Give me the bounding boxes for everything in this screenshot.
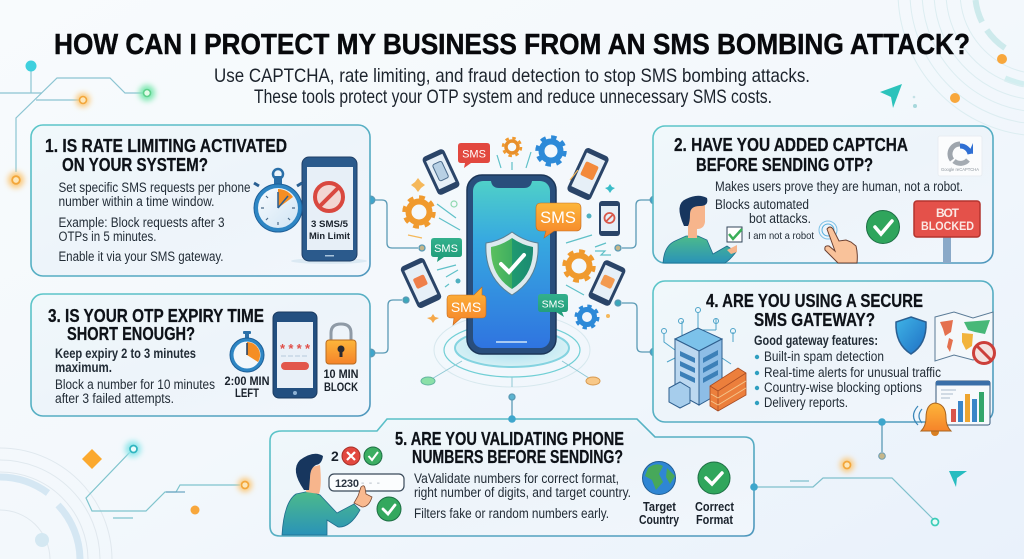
panel 2 body text: Makes users prove they are human, not a robot. — [715, 179, 963, 194]
icon: person with checkbox — [663, 196, 742, 263]
decorative circuit: bottom left — [0, 441, 252, 559]
panel 2 heading: 2. HAVE YOU ADDED CAPTCHA — [674, 135, 908, 155]
icon: server building — [662, 308, 736, 408]
decorative circuit: top left — [0, 60, 155, 188]
decorative circuit: bottom right — [754, 458, 967, 526]
phone number input field: 1230 — [335, 478, 359, 490]
panel 2 body text — [715, 179, 963, 242]
icon: padlock: 10 MIN — [324, 369, 358, 381]
panel 4: secure gateway — [653, 281, 994, 459]
central phone illustration — [399, 137, 627, 387]
phone number input field — [329, 474, 404, 507]
icon: bot blocked sign: BLOCKED — [921, 219, 974, 233]
icon: alert bell — [914, 403, 951, 436]
panel 3 heading: 3. IS YOUR OTP EXPIRY TIME — [48, 306, 264, 326]
panel 1 heading: ON YOUR SYSTEM? — [62, 155, 208, 175]
icon: target country globe — [639, 462, 679, 527]
panel 3 body text — [55, 346, 215, 406]
icon: stopwatch 2:00 left: LEFT — [235, 388, 259, 400]
subtitle: Use CAPTCHA, rate limiting, and fraud detection to stop SMS bombing attacks. — [214, 65, 810, 87]
base rings — [421, 313, 600, 387]
panel 5 body text: Filters fake or random numbers early. — [414, 506, 609, 521]
panel 4 feature list: Built-in spam detection — [764, 349, 884, 364]
subtitle — [214, 65, 810, 108]
icon: correct format check: Correct — [695, 500, 735, 514]
icon: reCAPTCHA badge — [938, 136, 982, 176]
icon: hand tapping — [819, 221, 857, 263]
panel 1 body text: Set specific SMS requests per phone — [58, 180, 250, 195]
shield — [486, 232, 538, 295]
panel 3 body text: Keep expiry 2 to 3 minutes — [55, 346, 196, 361]
panel 2 heading — [674, 135, 908, 175]
icon: world map with block sign — [935, 312, 994, 364]
panel 3 heading: SHORT ENOUGH? — [67, 324, 195, 344]
panel 5 heading: NUMBERS BEFORE SENDING? — [412, 447, 623, 467]
panel 5 body text — [414, 471, 631, 521]
icon: analytics chart window — [936, 381, 990, 425]
tilted phones — [399, 147, 627, 309]
icon: brick wall — [710, 368, 746, 411]
decorative radial arcs: top right — [898, 0, 1024, 135]
panel 1 body text: Enable it via your SMS gateway. — [58, 249, 224, 264]
panel 4 feature list: Country-wise blocking options — [764, 380, 922, 395]
icon: stopwatch 2:00 left: 2:00 MIN — [224, 376, 270, 388]
icon: bot blocked sign: BOT — [936, 206, 960, 220]
panel 4 feature list: Delivery reports. — [764, 395, 848, 410]
panel 1: rate limiting — [31, 125, 370, 276]
panel 1 body text: OTPs in 5 minutes. — [58, 229, 156, 244]
panel 2 body text: I am not a robot — [748, 230, 814, 242]
connectors from panels to central phone — [367, 196, 882, 452]
icon: target country globe: Target — [643, 500, 677, 514]
panel 1 body text — [58, 180, 250, 264]
panel 4 feature list: Good gateway features: — [754, 333, 878, 348]
subtitle: These tools protect your OTP system and reduce unnecessary SMS costs. — [254, 86, 772, 108]
icon: phone with OTP — [273, 312, 317, 398]
panel 4 feature list: Real-time alerts for unusual traffic — [764, 365, 941, 380]
icon: phone with limit — [291, 157, 367, 264]
panel 3 heading — [48, 306, 264, 344]
panel 2: CAPTCHA — [653, 126, 993, 263]
panel 3 body text: after 3 failed attempts. — [55, 391, 174, 406]
icon: stopwatch 2:00 left — [224, 331, 270, 400]
sms bubbles: SMS — [434, 243, 458, 255]
panel 5 heading — [395, 429, 624, 467]
panel 2 heading: BEFORE SENDING OTP? — [696, 155, 873, 175]
phone body — [467, 175, 556, 354]
icon: phone with OTP: **** — [280, 341, 311, 356]
icon: blue shield — [896, 317, 926, 354]
icon: correct format check — [695, 462, 735, 527]
panel 4 heading: SMS GATEWAY? — [754, 310, 875, 330]
panel 5 body text: VaValidate numbers for correct format, — [414, 471, 619, 486]
panel 3 body text: Block a number for 10 minutes — [55, 377, 215, 392]
validation indicators — [331, 447, 382, 465]
decorative accents: top right — [880, 54, 1007, 108]
gears — [404, 137, 598, 328]
sms bubbles: SMS — [462, 148, 486, 160]
icon: padlock: BLOCK — [324, 382, 359, 394]
sms bubbles: SMS — [540, 209, 576, 227]
icon: phone with limit: 3 SMS/5 — [311, 219, 349, 230]
icon: bot blocked sign — [914, 201, 980, 263]
icon: target country globe: Country — [639, 513, 679, 527]
panel 5: phone number validation — [270, 415, 758, 536]
icon: phone with limit: Min Limit — [309, 231, 351, 242]
icon: correct format check: Format — [696, 513, 734, 527]
icon: padlock — [324, 324, 359, 394]
icon: reCAPTCHA badge: Google reCAPTCHA — [941, 167, 979, 172]
panel 2 body text: Blocks automated — [715, 197, 809, 212]
panel 1 heading — [45, 136, 287, 175]
panel 1 heading: 1. IS RATE LIMITING ACTIVATED — [45, 136, 287, 156]
panel 1 body text: Example: Block requests after 3 — [58, 215, 224, 230]
panel 2 body text: bot attacks. — [749, 211, 811, 226]
validation indicators: 2 — [331, 448, 339, 464]
icon: green check — [866, 210, 900, 244]
panel 3 body text: maximum. — [55, 360, 112, 375]
panel 4 feature list — [754, 333, 941, 410]
panel 5 body text: right number of digits, and target country. — [414, 485, 631, 500]
panel 4 heading — [706, 291, 923, 330]
icon: green check — [377, 497, 401, 521]
panel 3: OTP expiry — [31, 294, 370, 416]
icon: stopwatch — [254, 169, 302, 232]
sms bubbles: SMS — [542, 298, 564, 310]
phone number input field: - - - — [361, 478, 380, 489]
panel 5 heading: 5. ARE YOU VALIDATING PHONE — [395, 429, 624, 449]
icon: person entering number — [282, 454, 360, 535]
sms bubbles — [431, 143, 581, 325]
panel 1 body text: number within a time window. — [58, 194, 214, 209]
panel 4 heading: 4. ARE YOU USING A SECURE — [706, 291, 923, 311]
sms bubbles: SMS — [451, 299, 481, 315]
sparkles and motion lines — [408, 152, 615, 323]
